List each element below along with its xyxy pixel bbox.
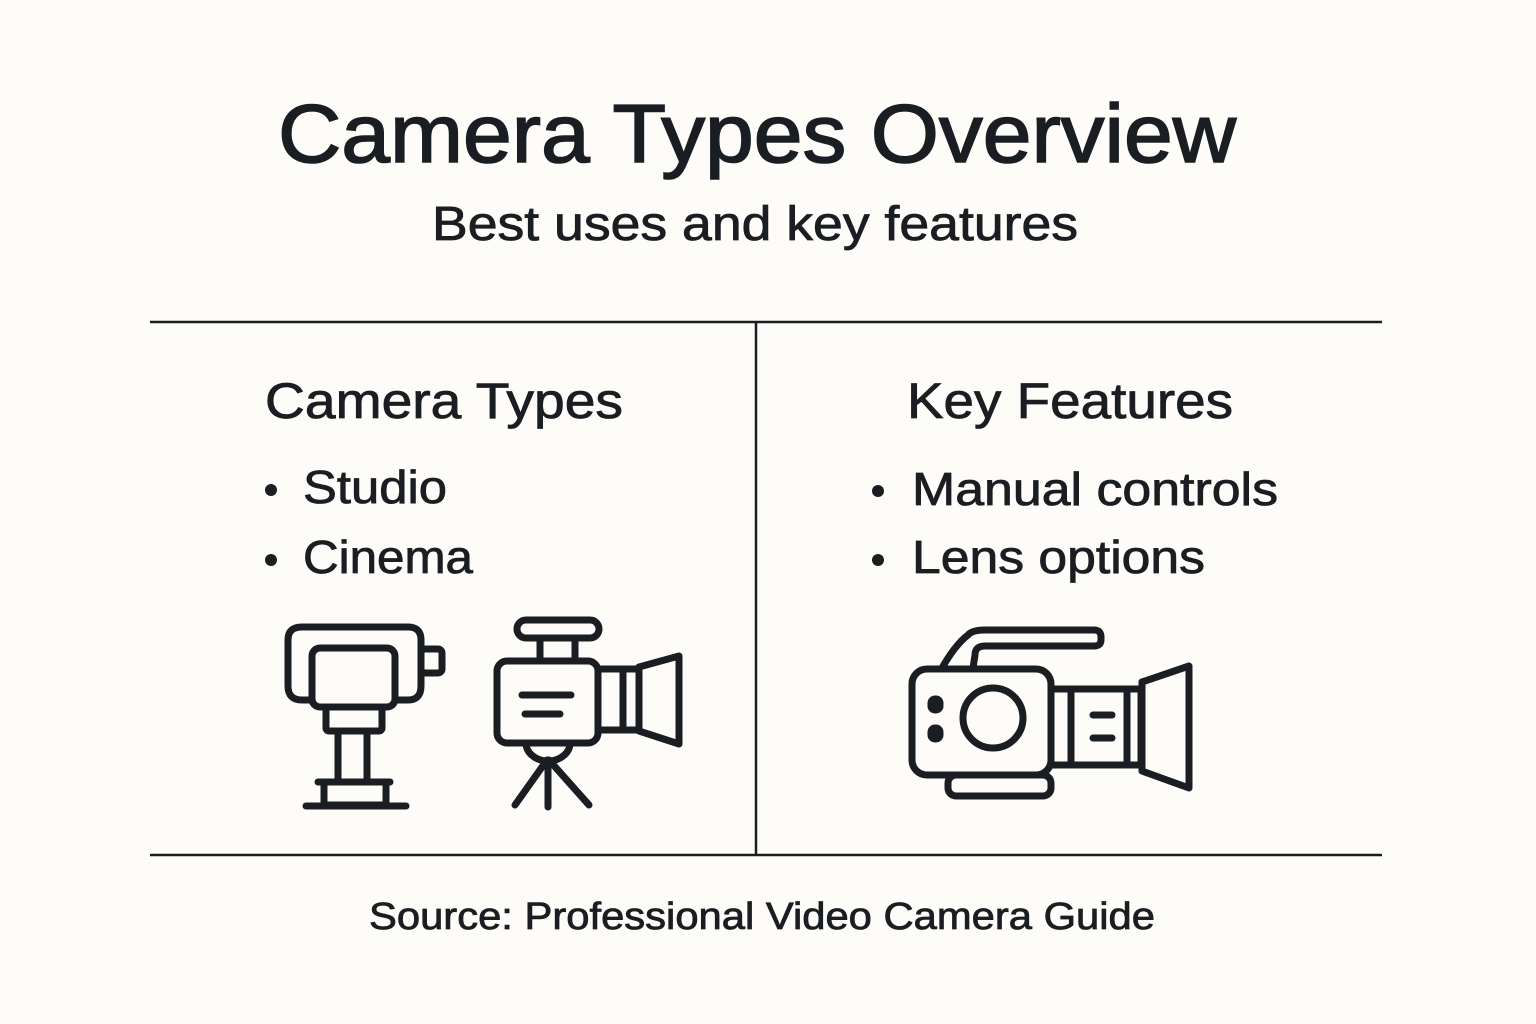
heading: key features: Key Features	[907, 373, 1233, 429]
panel: camera types	[265, 373, 679, 807]
bullet list: key features: Manual controls	[912, 463, 1278, 515]
icon: studio camera	[288, 627, 442, 806]
icon: cinema camera	[497, 620, 679, 807]
bullet list: key features: Lens options	[912, 531, 1205, 583]
source note: Source: Professional Video Camera Guide	[369, 896, 1155, 938]
bullet list: camera types: Cinema	[303, 531, 473, 583]
subtitle: Best uses and key features	[432, 198, 1078, 251]
icon: video camcorder	[912, 630, 1189, 796]
title: Camera Types Overview	[278, 87, 1237, 180]
bullet list: key features	[872, 463, 1278, 583]
bullet list: camera types: Studio	[303, 461, 447, 513]
bullet list: camera types	[265, 461, 473, 583]
panel: key features	[872, 373, 1278, 796]
heading: camera types: Camera Types	[265, 373, 623, 429]
